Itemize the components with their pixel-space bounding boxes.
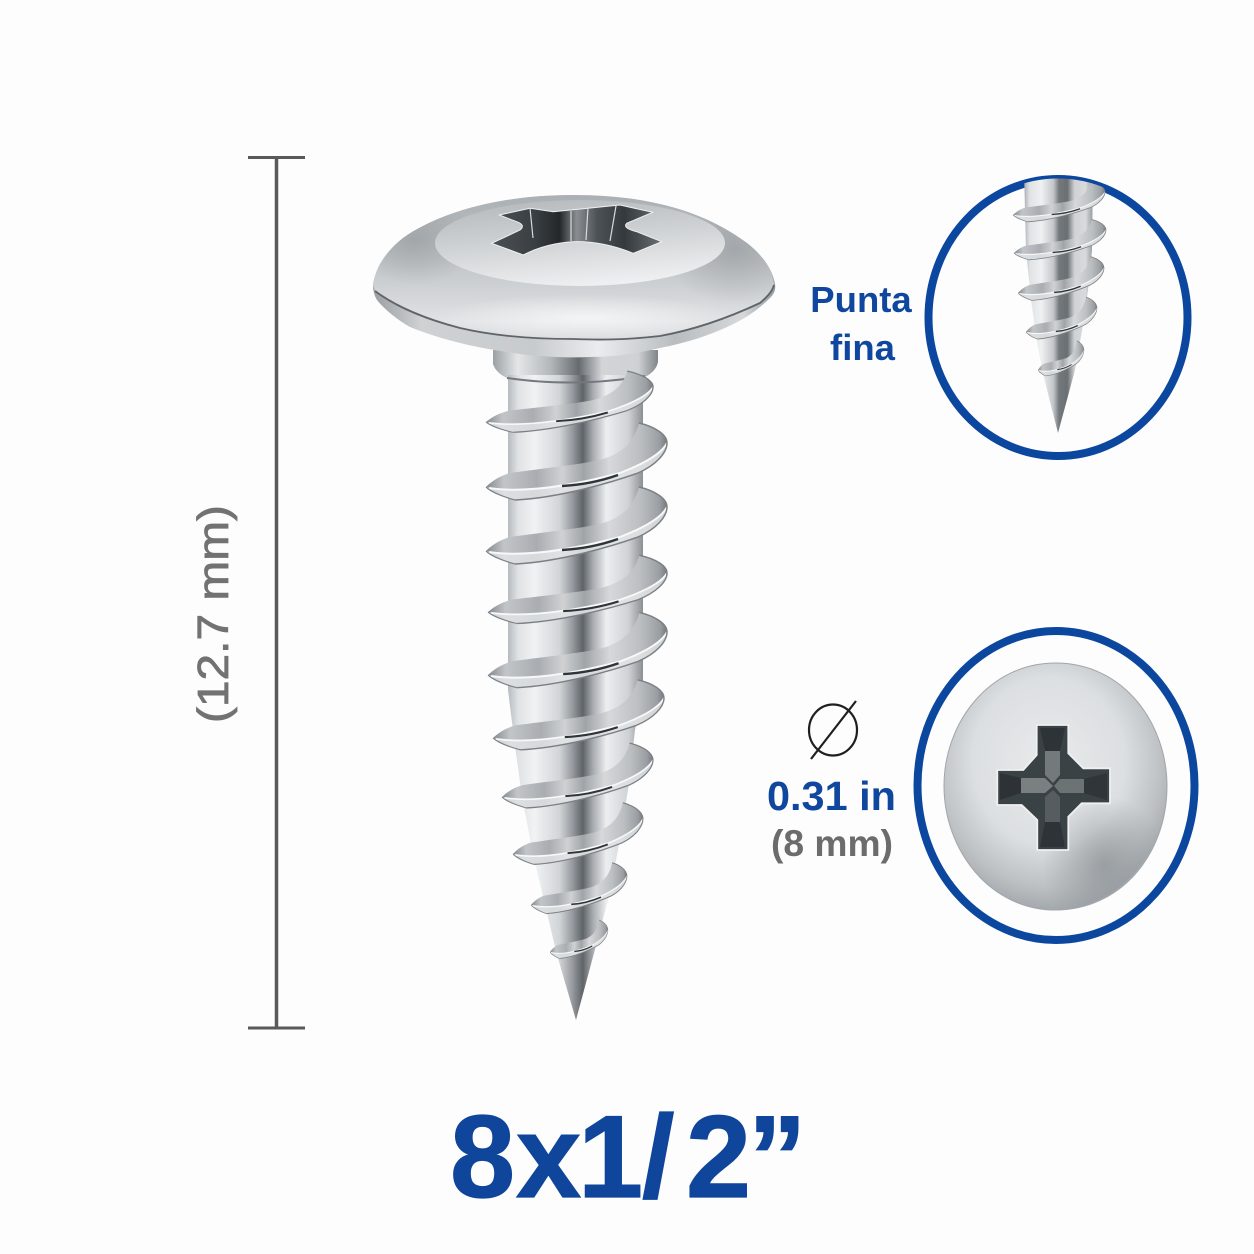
height dimension line xyxy=(248,157,305,1029)
cross recess xyxy=(492,205,662,255)
diameter in millimetres: (8 mm) xyxy=(771,823,893,864)
fine point label: fina xyxy=(830,327,896,368)
inset screw tip xyxy=(1013,170,1106,433)
head face xyxy=(944,663,1167,910)
inset: head top view xyxy=(918,631,1194,940)
height label: (12.7 mm) xyxy=(189,505,238,723)
inset ring xyxy=(928,179,1188,456)
diameter in inches: 0.31 in xyxy=(767,773,896,819)
fine point label: Punta xyxy=(810,279,912,320)
screw shaft xyxy=(508,375,643,1020)
inset: fine point xyxy=(928,170,1188,456)
diameter symbol xyxy=(809,701,857,759)
phillips cross xyxy=(997,725,1110,850)
fine point label xyxy=(810,279,912,368)
head ring xyxy=(918,631,1194,940)
head inner disk xyxy=(435,200,725,286)
main screw illustration xyxy=(355,190,805,1020)
screw neck xyxy=(493,350,658,378)
size title: 8x1/2” xyxy=(450,1091,806,1222)
screw head xyxy=(373,195,776,358)
head rim line xyxy=(375,285,774,340)
screw threads xyxy=(486,371,667,958)
